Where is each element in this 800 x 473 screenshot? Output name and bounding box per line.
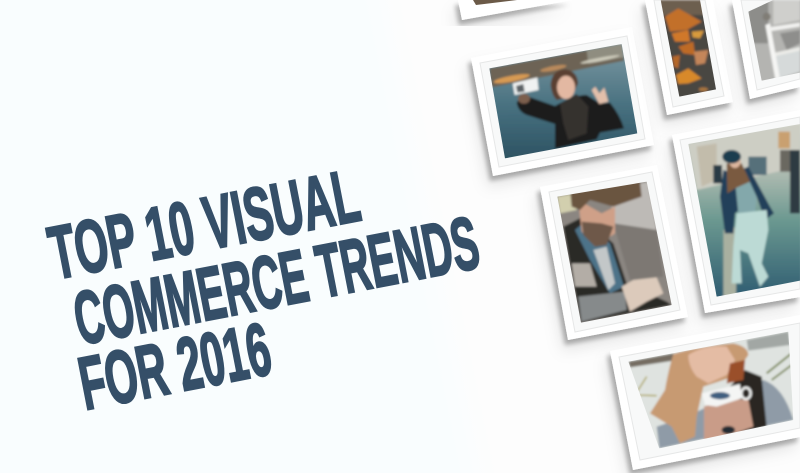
- frame: man with phone photo: [540, 165, 688, 340]
- frame: woman with coffee cup photo: [610, 315, 800, 470]
- frame: selfie photo: [471, 27, 654, 176]
- frame: top-left partial photo: [458, 0, 573, 20]
- title: FOR 2016: [72, 306, 278, 426]
- frame: autumn leaves photo: [645, 0, 733, 115]
- title: [42, 153, 486, 426]
- frame: bed rail photo: [732, 0, 800, 99]
- title: TOP 10 VISUAL: [42, 153, 366, 295]
- frame: woman walking photo: [672, 110, 800, 313]
